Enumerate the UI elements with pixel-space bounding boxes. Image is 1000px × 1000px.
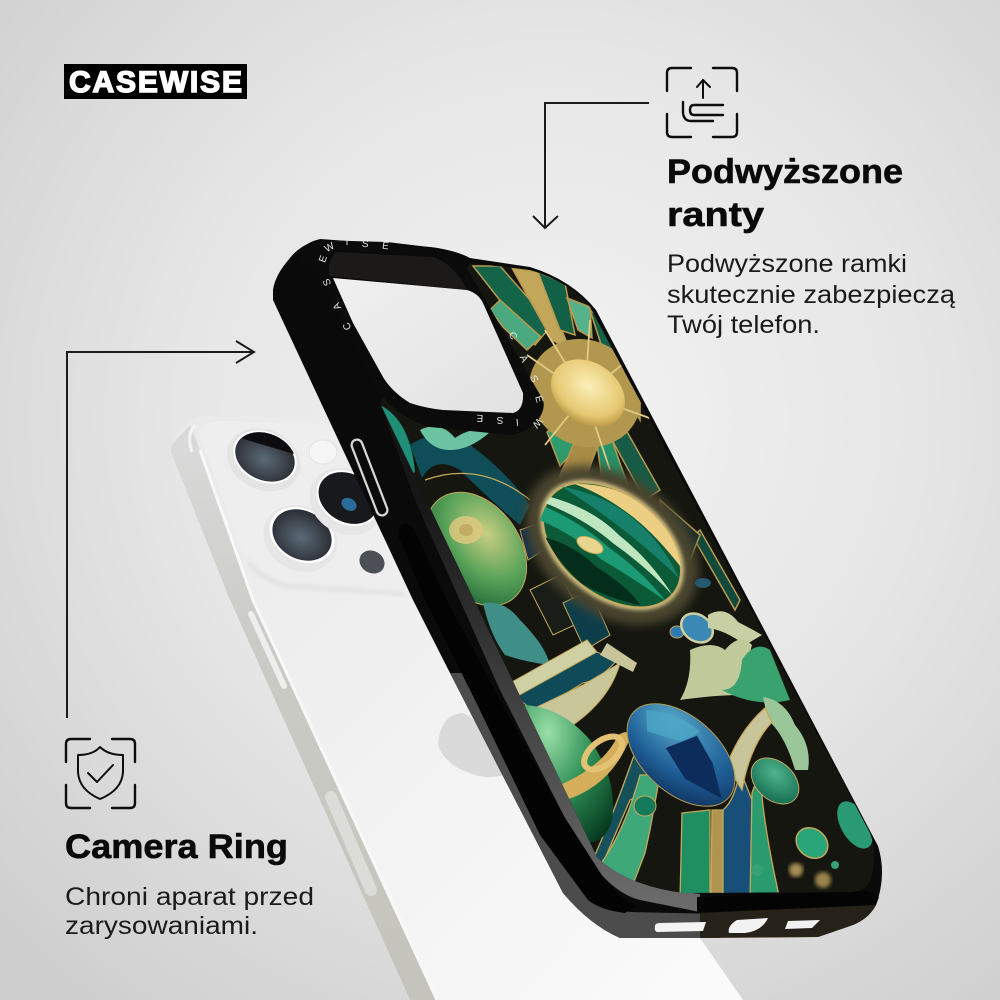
flash — [309, 440, 337, 464]
green smoke — [722, 647, 790, 702]
sun rays panels — [473, 266, 740, 610]
outer translucent edge — [450, 673, 720, 938]
bottom strip — [700, 893, 876, 938]
heading: camera ring: Camera Ring — [65, 828, 288, 866]
ring lettering bottom — [476, 330, 545, 430]
heading: raised edges: Podwyższone — [667, 153, 903, 191]
case body — [273, 239, 882, 938]
edge green planet — [837, 801, 872, 849]
camera ring — [298, 237, 545, 435]
dark tracks — [520, 520, 610, 650]
sun — [551, 359, 625, 426]
ring lettering bottom: S — [496, 414, 503, 425]
lens top — [217, 416, 311, 503]
bottom bezel — [697, 891, 879, 913]
window inner wall — [329, 252, 467, 290]
lens right — [297, 455, 395, 548]
icon: raised edges — [667, 68, 737, 137]
emerald gem — [795, 827, 829, 859]
green wisps right — [763, 697, 809, 770]
side button lower — [331, 797, 371, 890]
grey band beside art — [380, 403, 700, 912]
heading: raised edges — [667, 153, 903, 234]
lower-left green planet with ring — [520, 705, 630, 842]
center speckle ring — [520, 458, 704, 630]
ring lettering top: S — [361, 239, 369, 250]
ring lettering bottom: E — [476, 412, 483, 423]
small emerald gem — [634, 796, 656, 816]
usb port cutout — [729, 918, 768, 933]
ring lettering top: C — [341, 320, 354, 332]
mic cutout — [785, 920, 820, 929]
ring lettering top: E — [317, 254, 330, 264]
ring lettering bottom: A — [517, 354, 530, 365]
glow stars — [789, 863, 803, 877]
logo: CASEWISE — [69, 66, 242, 99]
lower stripes — [595, 708, 780, 900]
ring lettering top: E — [381, 241, 390, 252]
cream arc band — [510, 640, 597, 697]
ring lettering top: I — [346, 237, 348, 248]
ring lettering bottom: S — [527, 374, 540, 385]
text: raised edges description — [667, 250, 955, 339]
lens bottom — [252, 492, 349, 585]
dark gold wisp lines — [425, 473, 530, 500]
side button — [357, 445, 382, 510]
left planet — [430, 492, 528, 606]
sun halo disc — [530, 339, 641, 447]
text: raised edges description: skutecznie zabezpieczą — [667, 281, 955, 309]
speaker cutout — [655, 922, 706, 932]
lidar sensor — [355, 546, 389, 578]
ring lettering top: W — [323, 240, 337, 255]
heading: raised edges: ranty — [667, 196, 764, 234]
text: camera ring description — [65, 883, 314, 940]
ring lettering bottom: I — [515, 416, 519, 427]
ring lettering bottom: W — [529, 415, 544, 430]
case artwork — [380, 263, 874, 893]
green oval — [750, 758, 800, 804]
ring lettering top: A — [331, 300, 344, 311]
blue gem planet — [626, 703, 736, 807]
text: camera ring description: zarysowaniami. — [65, 912, 258, 940]
cream small panel — [600, 643, 637, 672]
ring lettering bottom: C — [506, 330, 519, 342]
cream smoke cloud — [680, 640, 752, 700]
text: raised edges description: Twój telefon. — [667, 311, 820, 339]
apple logo shadow — [438, 713, 505, 777]
arrow: left callout — [67, 341, 254, 718]
ring lettering top — [317, 237, 390, 332]
camera window — [333, 278, 523, 413]
side button upper — [251, 614, 284, 686]
center planet striped — [540, 482, 682, 608]
center planet eye — [576, 536, 604, 554]
icon: shield — [66, 739, 135, 808]
camera island — [198, 416, 425, 594]
swirls upper left — [381, 406, 415, 473]
teal arc band — [520, 652, 616, 707]
text: camera ring description: Chroni aparat przed — [65, 883, 314, 911]
black slot stripe — [398, 524, 636, 913]
left swirl smoke — [483, 603, 550, 665]
text: raised edges description: Podwyższone ramki — [667, 250, 907, 278]
cream lower arc — [537, 663, 620, 727]
cream smoke upper — [708, 611, 762, 645]
ring lettering top: S — [321, 276, 334, 287]
ring lettering bottom: E — [532, 395, 545, 404]
white phone behind the case — [165, 416, 743, 1000]
small blue gems — [670, 626, 684, 638]
arrow: top callout — [533, 103, 649, 228]
